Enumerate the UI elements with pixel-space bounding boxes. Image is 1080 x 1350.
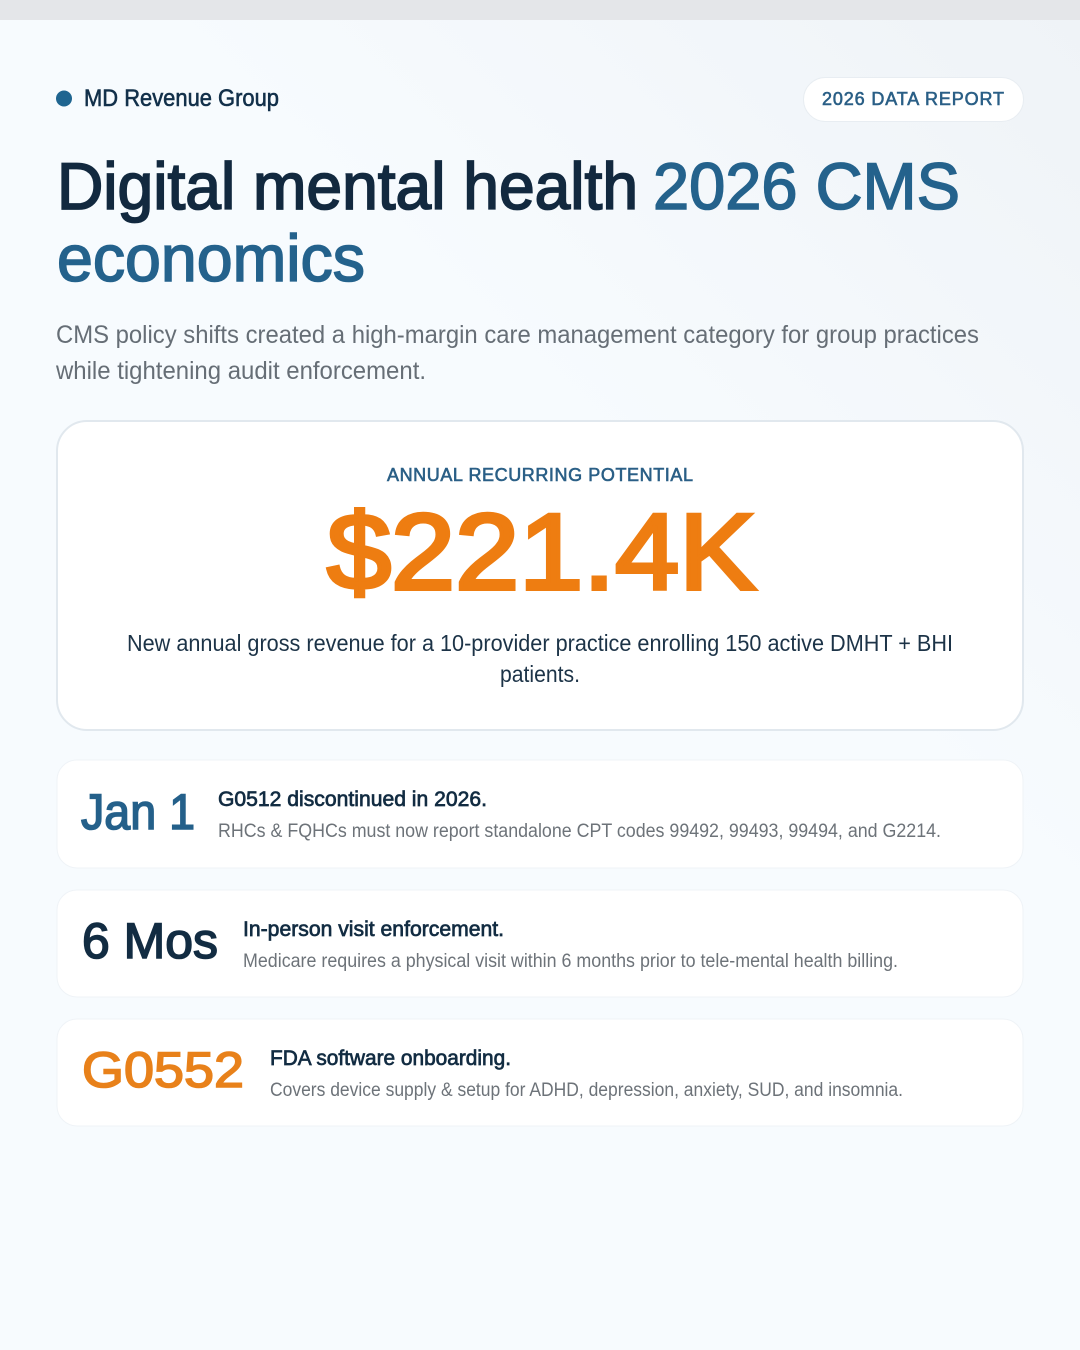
heading: FDA software onboarding. <box>270 1047 511 1070</box>
title: 2026 CMS <box>653 149 960 223</box>
row: G0552 <box>57 1019 1023 1126</box>
detail: Covers device supply & setup for ADHD, depression, anxiety, SUD, and insomnia. <box>270 1080 903 1101</box>
title <box>57 149 960 295</box>
stat: G0552 <box>82 1042 244 1098</box>
detail: RHCs & FQHCs must now report standalone CPT codes 99492, 99493, 99494, and G2214. <box>218 821 941 842</box>
detail: Medicare requires a physical visit within 6 months prior to tele-mental health billing. <box>243 951 898 972</box>
brand logo: MD Revenue Group <box>84 85 279 112</box>
badge: 2026 data report: 2026 DATA REPORT <box>822 89 1004 109</box>
panel description: patients. <box>500 661 580 687</box>
badge: 2026 data report <box>804 78 1024 122</box>
heading: In-person visit enforcement. <box>243 918 504 941</box>
panel label: ANNUAL RECURRING POTENTIAL <box>387 465 693 485</box>
row: Jan 1 <box>57 760 1023 868</box>
top strip <box>0 0 1080 20</box>
title: Digital mental health <box>57 149 638 223</box>
stat: Jan 1 <box>81 784 195 840</box>
heading: G0512 discontinued in 2026. <box>218 788 487 811</box>
panel description: New annual gross revenue for a 10-provider practice enrolling 150 active DMHT + BHI <box>127 630 953 656</box>
big number: $221.4K <box>327 491 756 612</box>
row: 6 Mos <box>57 890 1023 997</box>
title: economics <box>57 221 365 295</box>
subtitle <box>55 321 979 385</box>
subtitle: while tightening audit enforcement. <box>55 357 426 385</box>
stat: 6 Mos <box>82 913 218 969</box>
panel: annual recurring potential <box>57 421 1023 730</box>
subtitle: CMS policy shifts created a high-margin care management category for group practices <box>56 321 979 349</box>
panel description <box>127 630 953 687</box>
